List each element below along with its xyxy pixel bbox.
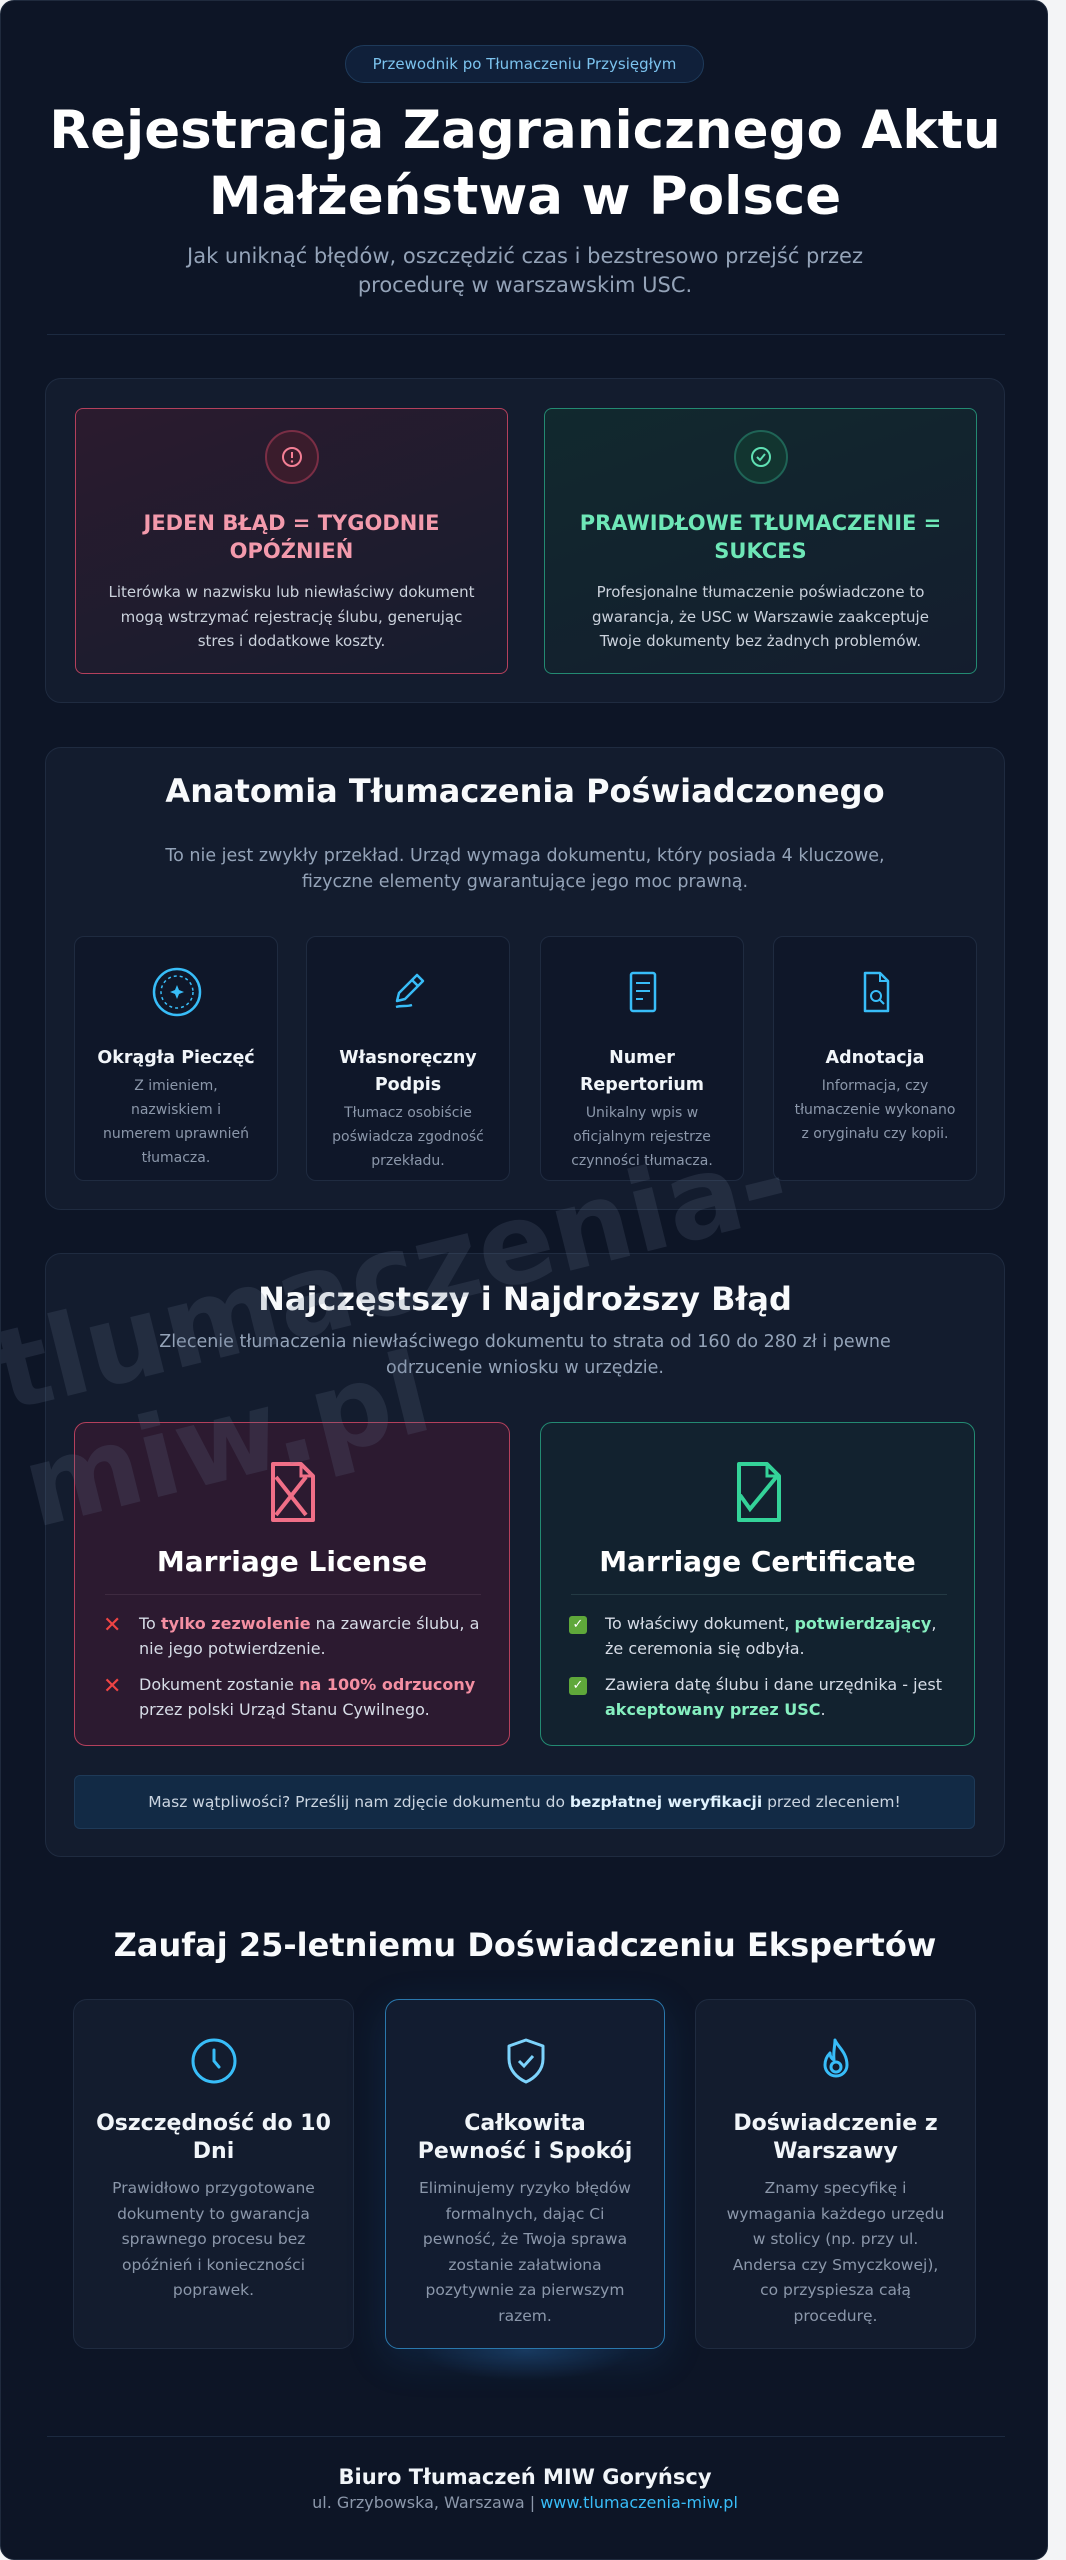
card: success	[544, 408, 977, 674]
watermark: miw.pl	[11, 1328, 443, 1554]
callout	[74, 1775, 975, 1829]
card: certainty	[385, 1999, 665, 2349]
error description: Zlecenie tłumaczenia niewłaściwego dokumentu to strata od 160 do 280 zł i pewne	[159, 1332, 891, 1352]
panel: most common error	[45, 1253, 1005, 1857]
error description: odrzucenie wniosku w urzędzie.	[386, 1358, 664, 1378]
badge	[345, 45, 704, 83]
bullet: Dokument zostanie na 100% odrzucony przez polski Urząd Stanu Cywilnego.	[139, 1675, 475, 1719]
text: Literówka w nazwisku lub niewłaściwy dokument	[108, 583, 475, 601]
card: certainty: Całkowita Pewność i Spokój	[418, 2111, 632, 2164]
bullet: ✓	[573, 1617, 583, 1632]
heading: SUKCES	[714, 539, 807, 563]
heading: PRAWIDŁOWE TŁUMACZENIE =	[580, 511, 941, 535]
heading: anatomy: Anatomia Tłumaczenia Poświadczonego	[165, 772, 885, 810]
bullet: ✕	[103, 1674, 121, 1699]
card: annotation: z oryginału czy kopii.	[801, 1126, 948, 1142]
card: signature	[306, 936, 510, 1181]
bullet: Zawiera datę ślubu i dane urzędnika - jest akceptowany przez USC.	[605, 1675, 942, 1719]
icon: doc check	[737, 1462, 781, 1522]
panel: error vs success	[45, 378, 1005, 703]
text: Twoje dokumenty bez żadnych problemów.	[600, 632, 921, 650]
card: annotation	[773, 936, 977, 1181]
footer: ul. Grzybowska, Warszawa | www.tlumaczenia-miw.pl	[312, 2493, 738, 2512]
card: marriage certificate	[540, 1422, 975, 1746]
card: warsaw experience	[695, 1999, 976, 2349]
heading: trust: Zaufaj 25-letniemu Doświadczeniu Ekspertów	[114, 1926, 936, 1964]
card: error	[75, 408, 508, 674]
card: annotation: tłumaczenie wykonano	[795, 1102, 955, 1118]
card: marriage license: Marriage License	[157, 1545, 427, 1578]
heading: error: Najczęstszy i Najdroższy Błąd	[258, 1280, 792, 1318]
heading: JEDEN BŁĄD = TYGODNIE	[144, 511, 440, 535]
icon: pen	[396, 974, 424, 1008]
card: warsaw experience: Znamy specyfikę i wymagania każdego urzędu w stolicy (np. przy ul. Andersa czy Smyczkowej), co przyspiesza całą procedurę.	[727, 2179, 944, 2324]
error description	[159, 1332, 891, 1378]
text: gwarancja, że USC w Warszawie zaakceptuje	[592, 608, 929, 626]
icon: document search	[864, 972, 890, 1012]
card: signature: Tłumacz osobiście poświadcza zgodność przekładu.	[332, 1105, 484, 1169]
footer: Biuro Tłumaczeń MIW Goryńscy	[338, 2465, 712, 2489]
text	[108, 583, 475, 650]
text: mogą wstrzymać rejestrację ślubu, generując	[121, 608, 462, 626]
panel: anatomy	[45, 747, 1005, 1210]
card: save time: Oszczędność do 10 Dni	[96, 2111, 331, 2164]
card: repertorium: Unikalny wpis w oficjalnym rejestrze czynności tłumacza.	[571, 1105, 713, 1169]
card: annotation: Adnotacja	[826, 1048, 924, 1068]
heading	[142, 511, 440, 563]
icon: alert	[265, 430, 319, 484]
card: save time: Prawidłowo przygotowane dokumenty to gwarancja sprawnego procesu bez opóźnień i konieczności poprawek.	[112, 2179, 315, 2299]
anatomy description: To nie jest zwykły przekład. Urząd wymaga dokumentu, który posiada 4 kluczowe,	[165, 846, 885, 866]
card: stamp	[74, 936, 278, 1181]
card: annotation: Informacja, czy	[822, 1078, 928, 1094]
text: stres i dodatkowe koszty.	[198, 632, 385, 650]
card: save time	[73, 1999, 354, 2349]
card: stamp: Z imieniem, nazwiskiem i numerem uprawnień tłumacza.	[103, 1078, 249, 1166]
card: marriage certificate: Marriage Certificate	[599, 1545, 916, 1578]
subtitle	[186, 244, 863, 297]
badge: Przewodnik po Tłumaczeniu Przysięgłym	[373, 55, 676, 73]
anatomy description: fizyczne elementy gwarantujące jego moc prawną.	[302, 872, 748, 892]
callout: Masz wątpliwości? Prześlij nam zdjęcie dokumentu do bezpłatnej weryfikacji przed zleceniem!	[148, 1793, 901, 1811]
title	[49, 100, 1001, 227]
card: repertorium	[540, 936, 744, 1181]
icon: clock	[192, 2038, 236, 2084]
bullet: To właściwy dokument, potwierdzający, że ceremonia się odbyła.	[605, 1614, 936, 1658]
subtitle: procedurę w warszawskim USC.	[358, 273, 692, 297]
heading	[580, 511, 941, 563]
icon: check	[734, 430, 788, 484]
title: Rejestracja Zagranicznego Aktu	[49, 100, 1001, 161]
watermark: tlumaczenia-	[0, 1115, 801, 1437]
glow	[421, 2321, 631, 2381]
bullet: ✓	[573, 1678, 583, 1693]
icon: document list	[630, 972, 656, 1012]
footer	[312, 2465, 738, 2512]
card: warsaw experience: Doświadczenie z Warszawy	[733, 2111, 938, 2164]
text	[592, 583, 929, 650]
heading: OPÓŹNIEŃ	[230, 539, 353, 563]
card: marriage license	[74, 1422, 510, 1746]
icon: doc x	[271, 1462, 315, 1522]
bullet: To tylko zezwolenie na zawarcie ślubu, a nie jego potwierdzenie.	[139, 1614, 479, 1658]
bullet: ✕	[103, 1613, 121, 1638]
text: Profesjonalne tłumaczenie poświadczone to	[597, 583, 924, 601]
anatomy description	[165, 846, 885, 892]
subtitle: Jak uniknąć błędów, oszczędzić czas i bezstresowo przejść przez	[187, 244, 863, 268]
icon: shield	[508, 2038, 544, 2084]
card: stamp: Okrągła Pieczęć	[97, 1048, 255, 1068]
icon: flame	[824, 2038, 848, 2078]
icon: stamp	[152, 968, 202, 1016]
card: certainty: Eliminujemy ryzyko błędów formalnych, dając Ci pewność, że Twoja sprawa zostanie załatwiona pozytywnie za pierwszym razem.	[419, 2179, 631, 2324]
card: signature: Własnoręczny Podpis	[339, 1048, 477, 1095]
card: repertorium: Numer Repertorium	[580, 1048, 704, 1095]
title: Małżeństwa w Polsce	[209, 166, 841, 227]
